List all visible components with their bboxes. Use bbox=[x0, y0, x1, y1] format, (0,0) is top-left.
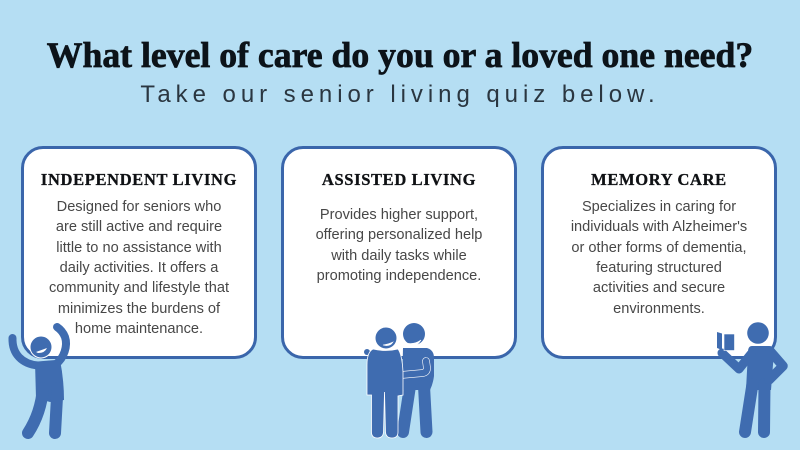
text: independent living description: Designed for seniors who bbox=[57, 199, 221, 215]
text: independent living description: minimizes the burdens of bbox=[58, 301, 220, 317]
text: assisted living description: offering personalized help bbox=[316, 227, 482, 243]
heading: memory care: MEMORY CARE bbox=[591, 170, 727, 189]
text: memory care description: featuring structured bbox=[596, 260, 722, 276]
text: memory care description: or other forms of dementia, bbox=[571, 240, 747, 256]
title: What level of care do you or a loved one need? bbox=[47, 35, 753, 75]
text: assisted living description: with daily tasks while bbox=[331, 248, 467, 264]
text: memory care description: individuals with Alzheimer's bbox=[571, 219, 747, 235]
text: independent living description: home maintenance. bbox=[75, 321, 203, 337]
text: memory care description: activities and secure bbox=[593, 280, 725, 296]
text: memory care description bbox=[571, 199, 747, 317]
text: assisted living description: promoting independence. bbox=[317, 268, 481, 284]
heading: independent living: INDEPENDENT LIVING bbox=[41, 170, 237, 189]
text: memory care description: environments. bbox=[613, 301, 705, 317]
text: independent living description bbox=[49, 199, 229, 337]
subtitle: Take our senior living quiz below. bbox=[140, 81, 660, 108]
text: memory care description: Specializes in caring for bbox=[582, 199, 736, 215]
icon: cheering person bbox=[12, 327, 66, 433]
text: independent living description: are still active and require bbox=[56, 219, 222, 235]
icon: person reading a book bbox=[717, 322, 783, 432]
icon: couple embracing bbox=[364, 323, 434, 438]
text: independent living description: daily activities. It offers a bbox=[60, 260, 218, 276]
text: assisted living description: Provides higher support, bbox=[320, 207, 478, 223]
text: assisted living description bbox=[316, 207, 482, 284]
heading: assisted living: ASSISTED LIVING bbox=[322, 170, 476, 189]
panel: independent living bbox=[21, 146, 257, 359]
panel: assisted living bbox=[281, 146, 517, 359]
panel: memory care bbox=[541, 146, 777, 359]
text: independent living description: little to no assistance with bbox=[56, 240, 222, 256]
text: independent living description: community and lifestyle that bbox=[49, 280, 229, 296]
